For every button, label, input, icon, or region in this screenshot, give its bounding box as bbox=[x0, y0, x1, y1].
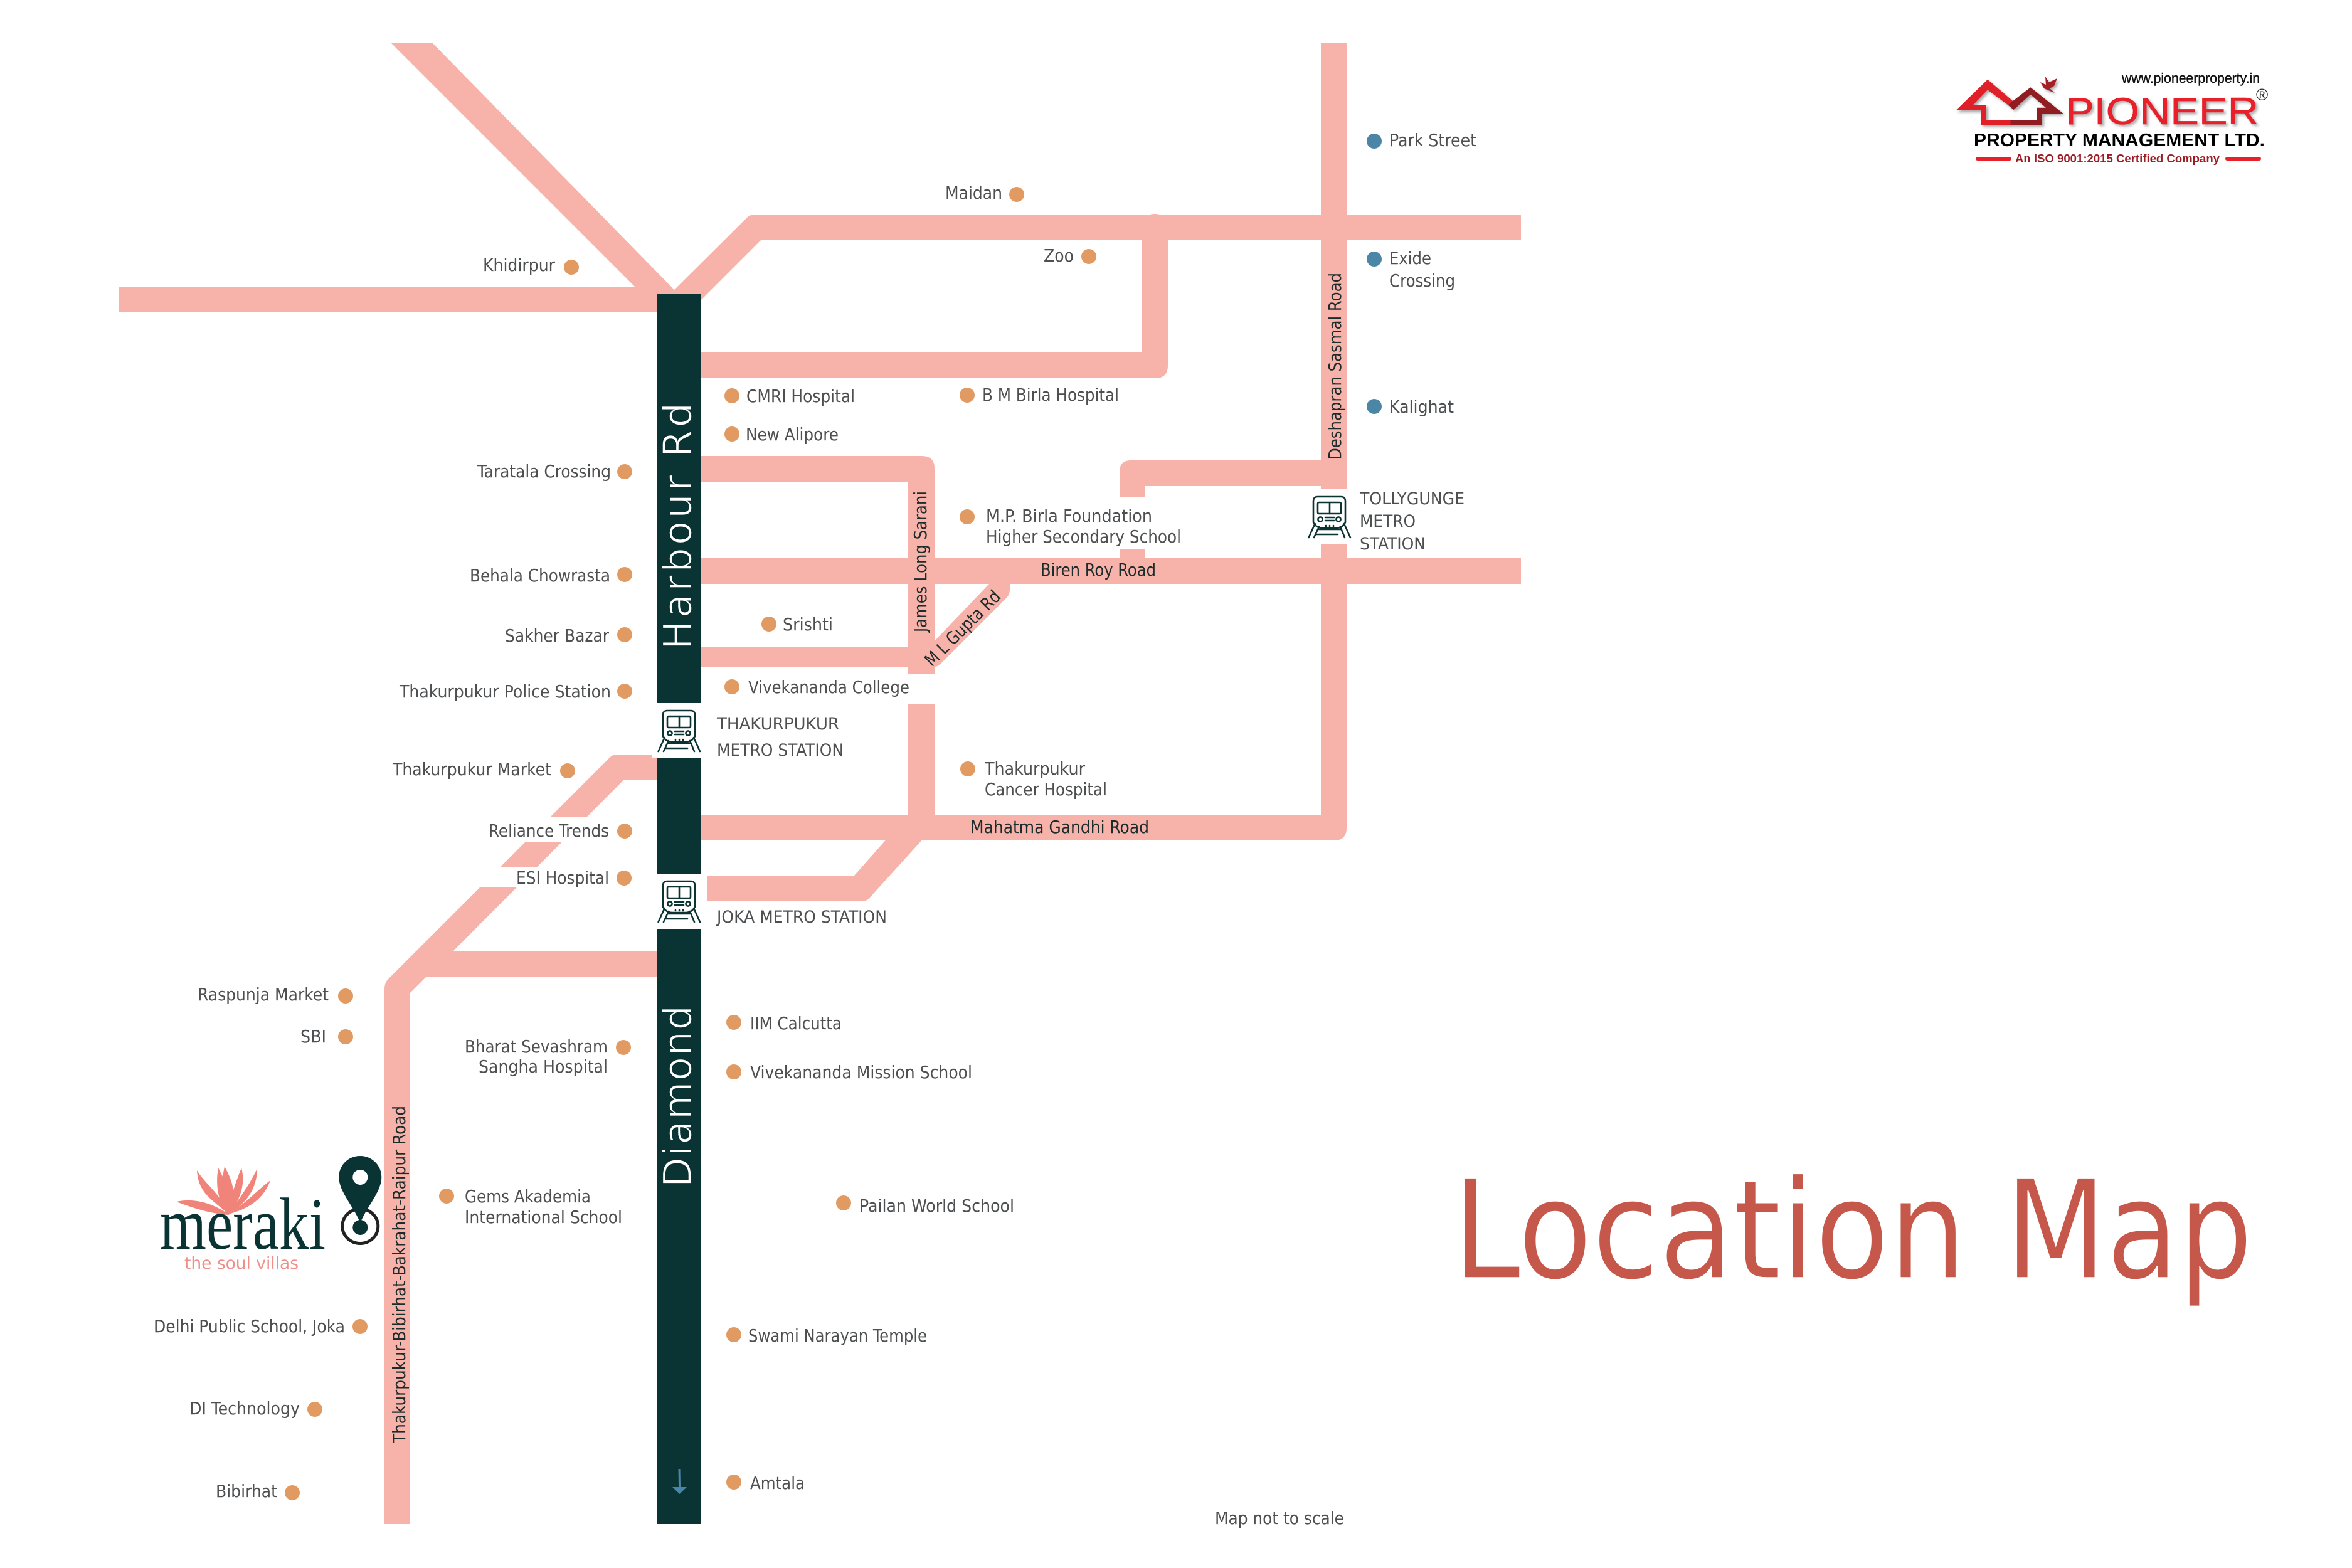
place: Exide Crossing: Crossing bbox=[1389, 270, 1455, 291]
place: Maidan: Maidan bbox=[945, 183, 1002, 203]
road: Biren Roy Road bbox=[701, 558, 1521, 584]
place: Vivekananda Mission School: Vivekananda Mission School bbox=[750, 1062, 972, 1083]
place: Bharat Sevashram Sangha Hospital: Sangha Hospital bbox=[479, 1056, 608, 1077]
station label: Joka Metro Station: JOKA METRO STATION bbox=[716, 908, 887, 927]
place: Kalighat: Kalighat bbox=[1389, 396, 1454, 417]
bar label: Harbour Rd: Harbour Rd bbox=[655, 403, 701, 650]
road: Srishti spur bbox=[701, 647, 914, 667]
place: Exide Crossing: Exide bbox=[1389, 248, 1431, 268]
station label: Thakurpukur Metro Station: METRO STATION bbox=[717, 741, 844, 760]
logo: Pioneer Property Management bbox=[1956, 70, 2268, 165]
place: Raspunja Market: Raspunja Market bbox=[198, 984, 329, 1005]
road label: Mahatma Gandhi Road: Mahatma Gandhi Road bbox=[970, 817, 1149, 837]
place: Gems Akademia International School bbox=[439, 1186, 622, 1227]
title: Location Map: Location bbox=[1453, 1152, 1966, 1310]
road network bbox=[119, 43, 1521, 1524]
place: M.P. Birla Foundation Higher Secondary School: M.P. Birla Foundation bbox=[986, 506, 1152, 526]
place: Taratala Crossing: Taratala Crossing bbox=[477, 461, 611, 482]
road: north-west diagonal and Khidirpur road bbox=[119, 43, 674, 312]
place: DI Technology: DI Technology bbox=[189, 1398, 300, 1419]
road label: Biren Roy Road: Biren Roy Road bbox=[1041, 559, 1156, 580]
logo flower bbox=[176, 1167, 270, 1215]
place: IIM Calcutta: IIM Calcutta bbox=[750, 1013, 842, 1034]
road: loop to Zoo bbox=[701, 214, 1168, 378]
logo house icon bbox=[1956, 77, 2063, 125]
place: Exide Crossing bbox=[1367, 248, 1455, 291]
place: Amtala bbox=[726, 1473, 805, 1493]
logo certification line bbox=[1976, 152, 2261, 165]
place: ESI Hospital: ESI Hospital bbox=[516, 867, 609, 888]
place: B M Birla Hospital: B M Birla Hospital bbox=[982, 384, 1119, 405]
place: Gems Akademia International School: Gems Akademia bbox=[465, 1186, 591, 1207]
station label: Thakurpukur Metro Station bbox=[716, 714, 844, 760]
icon: Joka metro bbox=[659, 881, 700, 922]
road label: Deshapran Sasmal Road: Deshapran Sasmal Road bbox=[1325, 273, 1345, 460]
place: Sakher Bazar: Sakher Bazar bbox=[505, 625, 610, 646]
logo certification line: An ISO 9001:2015 Certified Company bbox=[2015, 152, 2220, 165]
logo website: www.pioneerproperty.in bbox=[2121, 70, 2260, 86]
place: Thakurpukur Cancer Hospital bbox=[960, 758, 1107, 800]
place: Vivekananda College: Vivekananda College bbox=[748, 677, 909, 697]
place: SBI bbox=[300, 1026, 353, 1047]
logo wordmark: meraki bbox=[160, 1183, 326, 1265]
place: Park Street: Park Street bbox=[1389, 130, 1476, 151]
place: Thakurpukur Cancer Hospital: Cancer Hospital bbox=[985, 779, 1107, 800]
road: Deshapran Sasmal Road upper bbox=[1321, 43, 1347, 489]
logo PIONEER wordmark: PIONEER bbox=[2065, 90, 2259, 132]
note: Map not to scale: Map not to scale bbox=[1215, 1508, 1344, 1528]
road: top east road bbox=[665, 215, 1521, 307]
place: Swami Narayan Temple: Swami Narayan Temple bbox=[748, 1325, 927, 1346]
station label: Tollygunge Metro Station: STATION bbox=[1360, 534, 1426, 554]
icon: project location pin bbox=[339, 1156, 381, 1243]
place: CMRI Hospital: CMRI Hospital bbox=[746, 386, 855, 406]
place: Zoo bbox=[1044, 245, 1096, 266]
Diamond Harbour Rd bar bbox=[657, 294, 701, 1524]
place: New Alipore: New Alipore bbox=[746, 424, 839, 445]
station label: Thakurpukur Metro Station: THAKURPUKUR bbox=[716, 714, 839, 734]
place: Zoo: Zoo bbox=[1044, 245, 1074, 266]
road: Tollygunge stub bbox=[1120, 549, 1145, 562]
station label: Tollygunge Metro Station: METRO bbox=[1360, 512, 1416, 531]
place: Bharat Sevashram Sangha Hospital bbox=[465, 1036, 631, 1077]
logo company name: PROPERTY MANAGEMENT LTD. bbox=[1974, 130, 2265, 151]
icon: Thakurpukur metro bbox=[659, 711, 700, 751]
place: Khidirpur: Khidirpur bbox=[483, 255, 556, 275]
place: Reliance Trends: Reliance Trends bbox=[489, 820, 609, 841]
logo: meraki the soul villas bbox=[160, 1167, 326, 1273]
place: Bibirhat: Bibirhat bbox=[216, 1481, 277, 1502]
road: Joka spur bbox=[707, 837, 924, 901]
place: M.P. Birla Foundation Higher Secondary School: Higher Secondary School bbox=[986, 526, 1181, 547]
station label: Tollygunge Metro Station: TOLLYGUNGE bbox=[1359, 489, 1465, 509]
label gap: Reliance Trends bbox=[452, 817, 640, 842]
icon: Tollygunge metro bbox=[1309, 497, 1350, 538]
place: Srishti: Srishti bbox=[783, 614, 833, 635]
place: Amtala: Amtala bbox=[750, 1473, 805, 1493]
place: SBI: SBI bbox=[300, 1026, 326, 1047]
place: Behala Chowrasta: Behala Chowrasta bbox=[470, 565, 610, 586]
place: Thakurpukur Police Station: Thakurpukur Police Station bbox=[399, 681, 611, 702]
place: Delhi Public School, Joka: Delhi Public School, Joka bbox=[154, 1316, 345, 1337]
label gap: ESI Hospital bbox=[452, 867, 640, 887]
place: Pailan World School: Pailan World School bbox=[859, 1195, 1014, 1216]
road label: M L Gupta Rd: M L Gupta Rd bbox=[921, 586, 1005, 670]
station label: Tollygunge Metro Station bbox=[1359, 489, 1465, 554]
road label: James Long Sarani: James Long Sarani bbox=[910, 491, 931, 633]
logo registered mark: ® bbox=[2256, 85, 2268, 104]
road: M L Gupta Rd bbox=[928, 584, 1010, 667]
road label: Thakurpukur-Bibirhat-Bakrahat-Raipur Road: Thakurpukur-Bibirhat-Bakrahat-Raipur Road bbox=[389, 1106, 410, 1444]
place: Bharat Sevashram Sangha Hospital: Bharat Sevashram bbox=[465, 1036, 608, 1057]
road: James Long Sarani upper bbox=[701, 456, 935, 674]
arrow: southward direction bbox=[672, 1469, 687, 1494]
road: Thakurpukur-Bibirhat road bbox=[384, 755, 659, 1524]
road: Tollygunge spur bbox=[1120, 460, 1330, 497]
title: Location Map: Map bbox=[2005, 1152, 2253, 1310]
road: James Long Sarani lower bbox=[908, 704, 935, 830]
place: Srishti bbox=[761, 614, 833, 635]
title: Location Map bbox=[1453, 1152, 2253, 1310]
bar label: Diamond: Diamond bbox=[655, 1005, 701, 1187]
place: Thakurpukur Cancer Hospital: Thakurpukur bbox=[984, 758, 1086, 779]
place: M.P. Birla Foundation Higher Secondary School bbox=[960, 506, 1181, 547]
logo tagline: the soul villas bbox=[184, 1254, 299, 1273]
place: Thakurpukur Market: Thakurpukur Market bbox=[392, 759, 551, 780]
place: Gems Akademia International School: International School bbox=[465, 1207, 622, 1227]
road: Mahatma Gandhi Road bbox=[701, 544, 1347, 840]
